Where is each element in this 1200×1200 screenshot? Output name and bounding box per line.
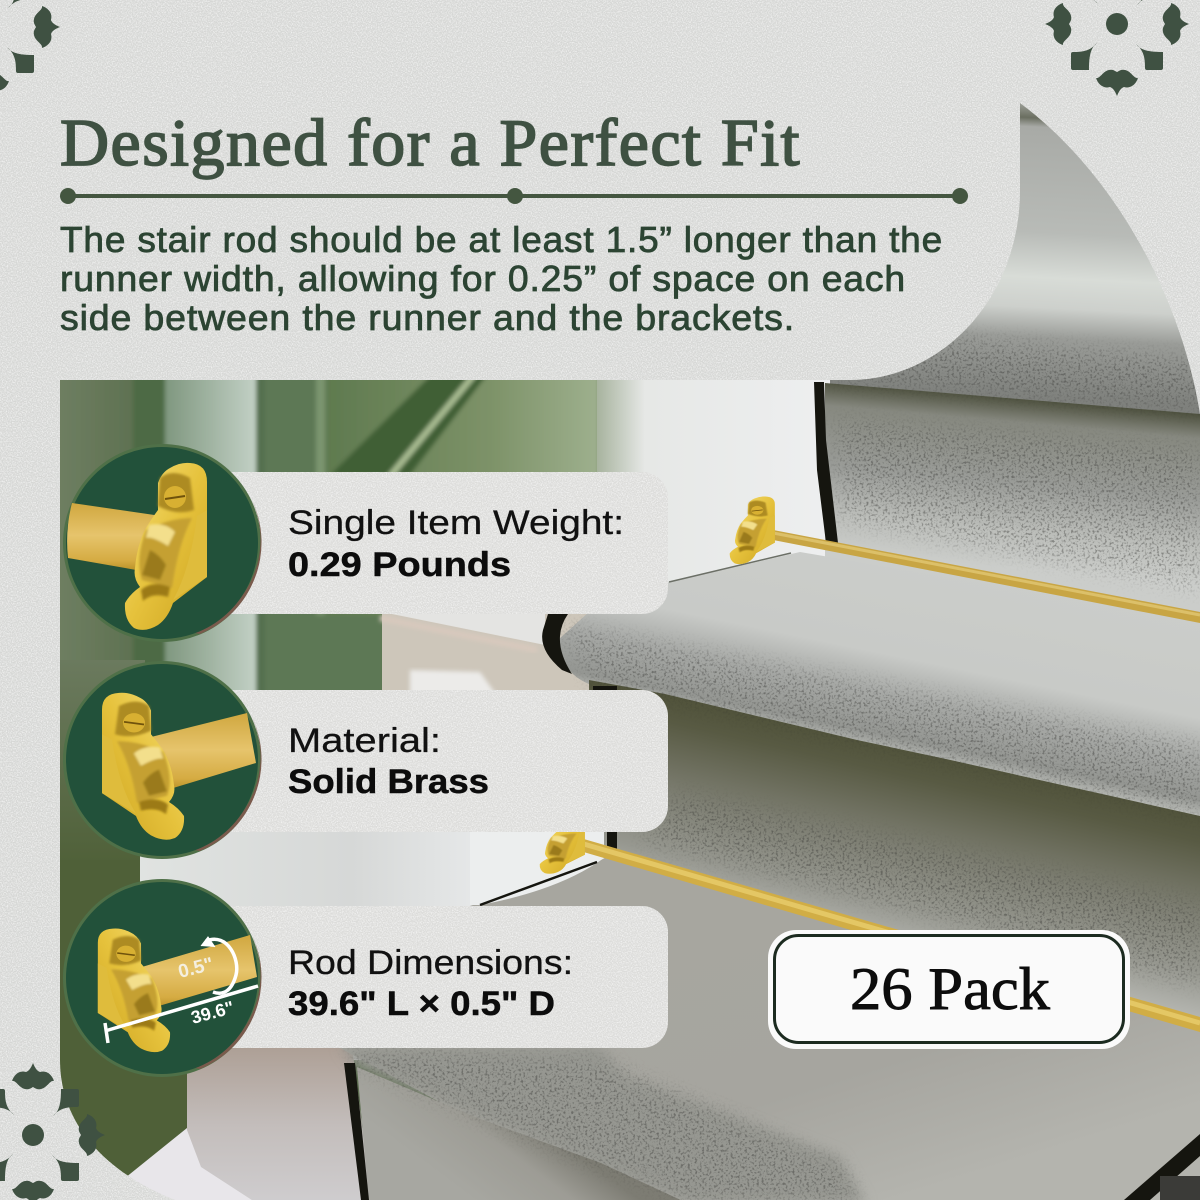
intro text: runner width, allowing for 0.25” of space on each: [60, 258, 906, 299]
intro text: The stair rod should be at least 1.5” longer than the: [60, 219, 943, 260]
icon: bracket detail circle two: [63, 661, 262, 859]
ornament: top left: [0, 0, 60, 99]
diameter label: 0.5": [176, 954, 216, 983]
carpet texture overlays: [345, 330, 1200, 1200]
spec card: weight: 0.29 Pounds: [288, 546, 511, 584]
green panelled wall: [55, 375, 599, 695]
third riser: [357, 1067, 685, 1200]
badge: 26 pack: [768, 930, 1130, 1049]
carpet landing: [830, 100, 1200, 420]
spec card: material: Material:: [288, 722, 441, 760]
intro text: side between the runner and the brackets.: [60, 297, 795, 338]
third nose: [340, 1046, 866, 1200]
title: Designed for a Perfect Fit: [60, 106, 801, 180]
white riser beside the wall: [597, 375, 837, 590]
icon: bracket dimensions circle three: [63, 879, 262, 1077]
third tread: [340, 850, 1200, 1200]
icon: bracket detail circle one: [63, 444, 262, 642]
length line: [105, 986, 258, 1043]
stair rod two: [540, 814, 1200, 1032]
second riser: [589, 680, 1200, 1030]
spec card: weight: Single Item Weight:: [288, 504, 624, 542]
ornament: bottom left: [0, 1063, 105, 1200]
spec card: material: Solid Brass: [288, 763, 489, 801]
tread two: [558, 552, 1200, 830]
rotation arrow: [201, 937, 237, 993]
first riser: [825, 383, 1200, 640]
divider with three dots: [60, 188, 968, 204]
skirting board: [380, 612, 610, 700]
black runner bindings: [344, 382, 1200, 1200]
length label: 39.6": [189, 997, 236, 1028]
ornament: top right: [1045, 0, 1189, 96]
lower wall and white stringer: [55, 660, 610, 1200]
spec card: dimensions: Rod Dimensions:: [288, 944, 573, 982]
spec card: material: [200, 690, 668, 832]
spec card: dimensions: 39.6" L × 0.5" D: [288, 985, 555, 1023]
white curved tread edge: [470, 832, 604, 905]
spec card: dimensions: [200, 906, 668, 1048]
badge: 26 pack: 26 Pack: [850, 956, 1050, 1022]
intro text: [60, 219, 943, 338]
spec card: weight: [200, 472, 668, 614]
stair rod one: [730, 496, 1200, 623]
